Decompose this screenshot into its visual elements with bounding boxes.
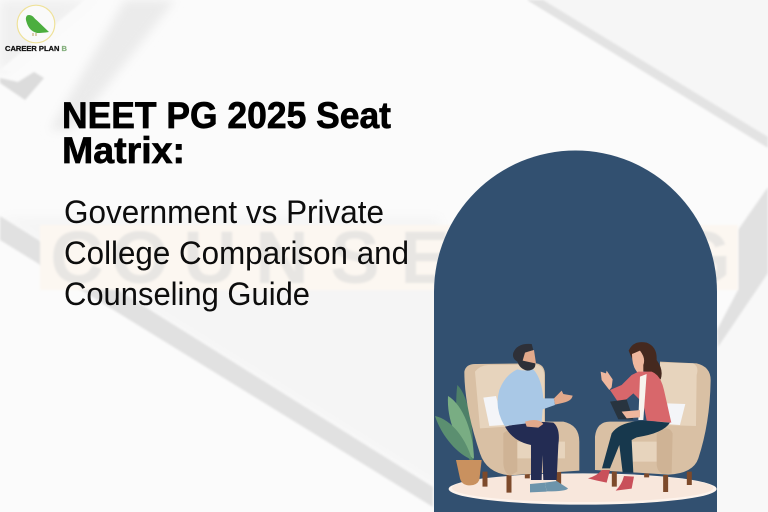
- man: [498, 344, 573, 492]
- panel: navy arch: [434, 151, 717, 512]
- right armchair: [595, 362, 711, 492]
- rug: [449, 473, 717, 505]
- subtitle: [64, 194, 409, 312]
- counseling word tiles: COUNSELING: [50, 216, 731, 299]
- subtitle: College Comparison and: [64, 235, 409, 271]
- subtitle: Government vs Private: [64, 194, 384, 230]
- title: Matrix:: [62, 130, 185, 171]
- icon: potted plant: [435, 385, 482, 485]
- woman: [588, 342, 671, 491]
- logo wordmark: CAREER PLAN B: [5, 44, 68, 53]
- title: [62, 95, 391, 171]
- title: NEET PG 2025 Seat: [62, 95, 391, 136]
- left armchair: [464, 363, 579, 493]
- subtitle: Counseling Guide: [64, 276, 310, 312]
- illustration: counseling conversation: [435, 342, 717, 505]
- logo: Career Plan B: [5, 5, 68, 53]
- icon: bird in circle: [17, 5, 55, 43]
